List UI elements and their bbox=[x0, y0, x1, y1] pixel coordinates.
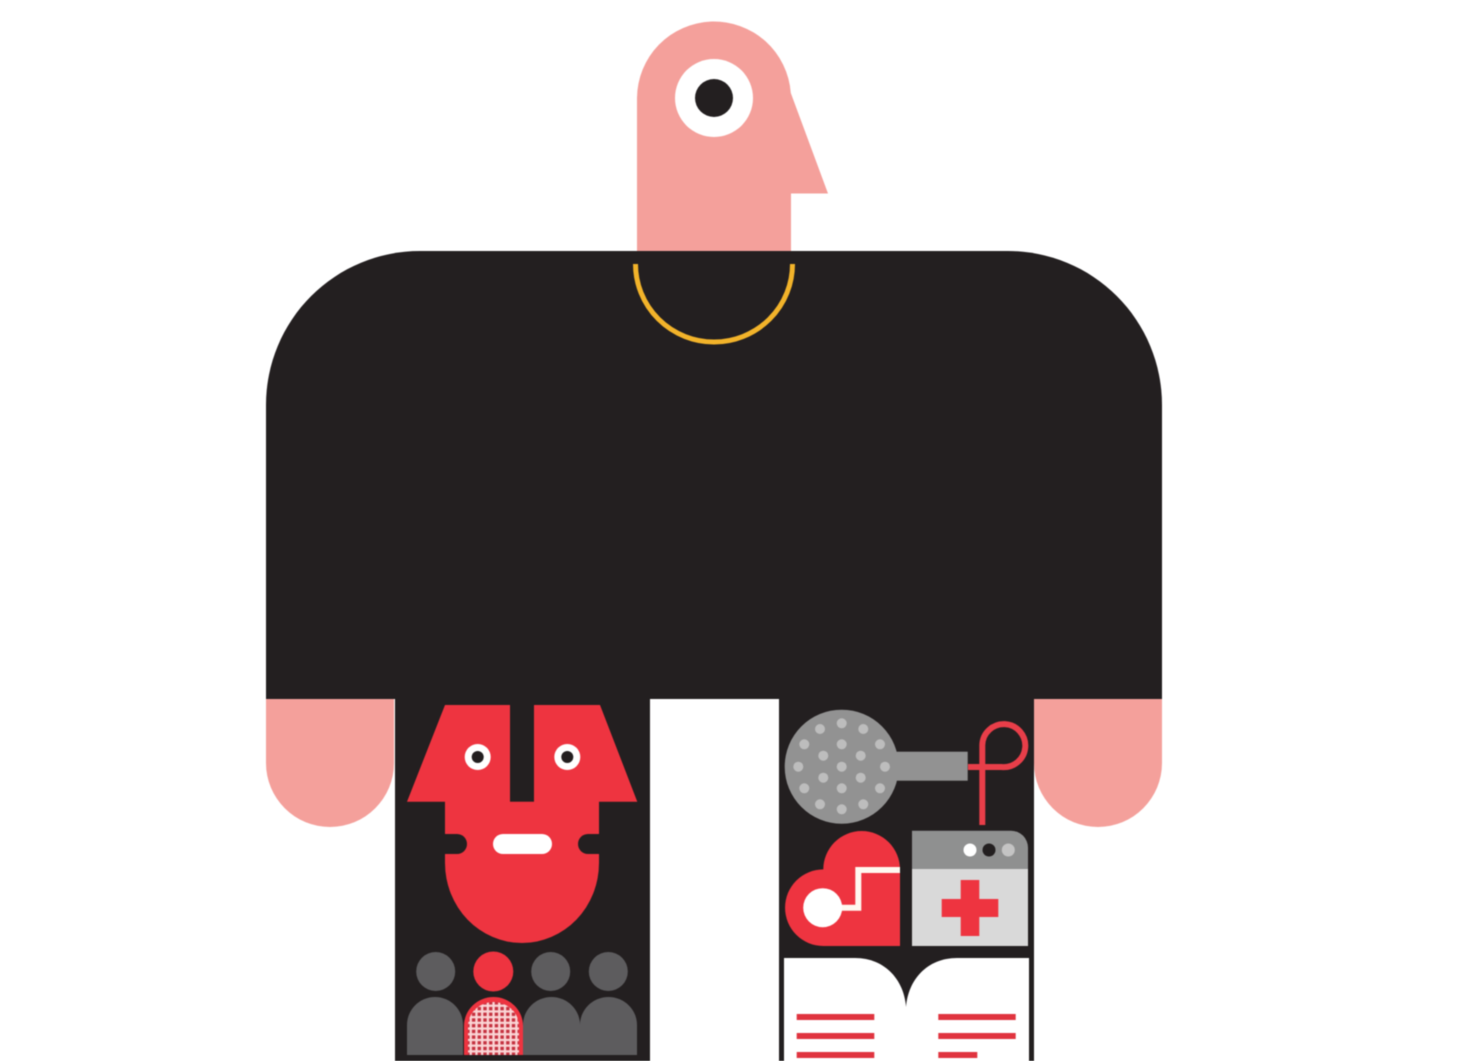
illustration: figure with health icons bbox=[265, 21, 1163, 1061]
necklace bbox=[636, 264, 792, 342]
left hand bbox=[266, 699, 394, 827]
icon: ribbon bbox=[968, 724, 1025, 825]
icon: medical browser window bbox=[912, 831, 1028, 946]
panel: left leg bbox=[395, 699, 650, 1061]
icon: heart with pulse line bbox=[785, 831, 900, 946]
torso bbox=[266, 251, 1162, 699]
icon: red face bbox=[407, 705, 637, 943]
icon: open book bbox=[784, 958, 1029, 1061]
icon: head eye bbox=[675, 59, 753, 137]
head bbox=[637, 22, 828, 251]
right hand bbox=[1034, 699, 1162, 827]
panel: right leg bbox=[779, 699, 1034, 1061]
icon: group of people bbox=[407, 952, 637, 1055]
icon: perforated spoon bbox=[785, 710, 968, 824]
